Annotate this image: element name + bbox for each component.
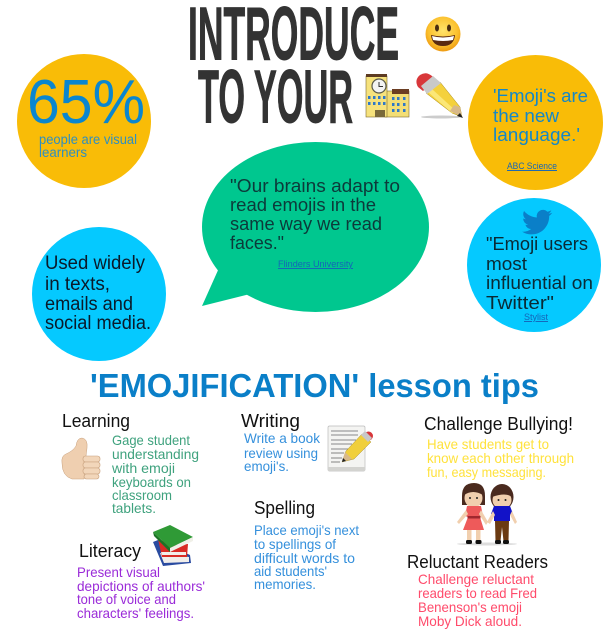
cyan circle xyxy=(467,198,601,332)
section heading: 'EMOJIFICATION' lesson tips xyxy=(90,367,539,404)
quote: language.' xyxy=(493,125,580,145)
panel: used widely xyxy=(32,227,166,361)
panel: twitter quote xyxy=(467,198,601,332)
title xyxy=(188,0,399,138)
quote text: read emojis in the xyxy=(230,195,376,215)
body: Have students get to xyxy=(427,436,549,452)
statistic: 65% xyxy=(27,68,145,137)
icon: smiling face emoji xyxy=(426,16,460,52)
panel: 65% visual learners xyxy=(17,54,151,188)
body: readers to read Fred xyxy=(418,585,537,601)
body xyxy=(418,571,537,629)
cyan circle xyxy=(32,227,166,361)
quote: most xyxy=(486,253,527,274)
tip: challenge bullying xyxy=(424,414,574,546)
heading: Challenge Bullying! xyxy=(424,414,573,434)
icon: pencil emoji xyxy=(416,73,463,118)
quote text xyxy=(230,176,400,253)
body: to spellings of xyxy=(254,536,336,552)
orange circle xyxy=(468,55,603,190)
girl xyxy=(457,483,488,544)
body: characters' feelings. xyxy=(77,605,194,621)
body: memories. xyxy=(254,576,316,592)
quote: Twitter" xyxy=(486,292,554,313)
quote xyxy=(493,86,588,145)
icon: books xyxy=(153,525,193,566)
tip: spelling xyxy=(254,498,359,592)
text: social media. xyxy=(45,313,151,334)
source link: Stylist xyxy=(524,312,548,323)
quote text: "Our brains adapt to xyxy=(230,176,400,196)
body: keyboards on xyxy=(112,474,191,490)
quote xyxy=(486,233,593,313)
heading: Literacy xyxy=(79,541,141,561)
quote: 'Emoji's are xyxy=(493,86,588,106)
body: review using xyxy=(244,445,318,461)
orange circle xyxy=(17,54,151,188)
body xyxy=(77,564,205,621)
quote: "Emoji users xyxy=(486,233,588,254)
body: depictions of authors' xyxy=(77,578,205,594)
tip: literacy xyxy=(77,525,205,621)
tip: writing xyxy=(241,411,373,474)
caption: people are visual xyxy=(39,132,137,147)
body: Challenge reluctant xyxy=(418,571,534,587)
body: know each other through xyxy=(427,450,574,466)
panel: new language quote xyxy=(468,55,603,190)
panel: speech bubble quote xyxy=(202,142,429,312)
icon: thumbs up xyxy=(62,438,100,479)
quote: influential on xyxy=(486,272,593,293)
quote text: faces." xyxy=(230,233,284,253)
icon: school building emoji xyxy=(366,74,409,117)
body: Moby Dick aloud. xyxy=(418,613,522,629)
body: with emoji xyxy=(111,460,175,476)
icon: memo and pencil xyxy=(328,426,373,471)
icon: couple holding hands xyxy=(457,483,517,546)
body: emoji's. xyxy=(244,458,289,474)
caption: learners xyxy=(39,145,87,160)
body xyxy=(427,436,574,480)
body: fun, easy messaging. xyxy=(427,464,546,480)
body: Write a book xyxy=(244,430,321,446)
tip: reluctant readers xyxy=(407,552,548,629)
body xyxy=(111,432,199,516)
heading: Writing xyxy=(241,411,300,431)
body: Present visual xyxy=(77,564,160,580)
heading: Reluctant Readers xyxy=(407,552,548,572)
quote text: same way we read xyxy=(230,214,382,234)
body xyxy=(254,522,359,592)
icon: twitter bird xyxy=(522,210,552,234)
tip: learning xyxy=(62,411,199,516)
heading: Learning xyxy=(62,411,130,431)
caption xyxy=(39,132,137,160)
body xyxy=(244,430,321,474)
title: TO YOUR xyxy=(198,54,353,138)
text: emails and xyxy=(45,294,133,315)
source link: ABC Science xyxy=(507,161,557,172)
text: in texts, xyxy=(45,274,110,295)
body: Gage student xyxy=(112,432,190,448)
bubble shape xyxy=(202,142,429,312)
body: classroom xyxy=(112,487,172,503)
body: difficult words to xyxy=(254,550,355,566)
heading: Spelling xyxy=(254,498,315,518)
body: understanding xyxy=(112,446,199,462)
body: Benenson's emoji xyxy=(418,599,522,615)
text xyxy=(45,253,151,334)
boy xyxy=(487,484,517,544)
body: Place emoji's next xyxy=(254,522,359,538)
source link: Flinders University xyxy=(278,259,353,270)
text: Used widely xyxy=(45,253,145,274)
body: tablets. xyxy=(112,500,156,516)
body: aid students' xyxy=(254,563,327,579)
quote: the new xyxy=(493,106,560,126)
body: tone of voice and xyxy=(77,591,176,607)
